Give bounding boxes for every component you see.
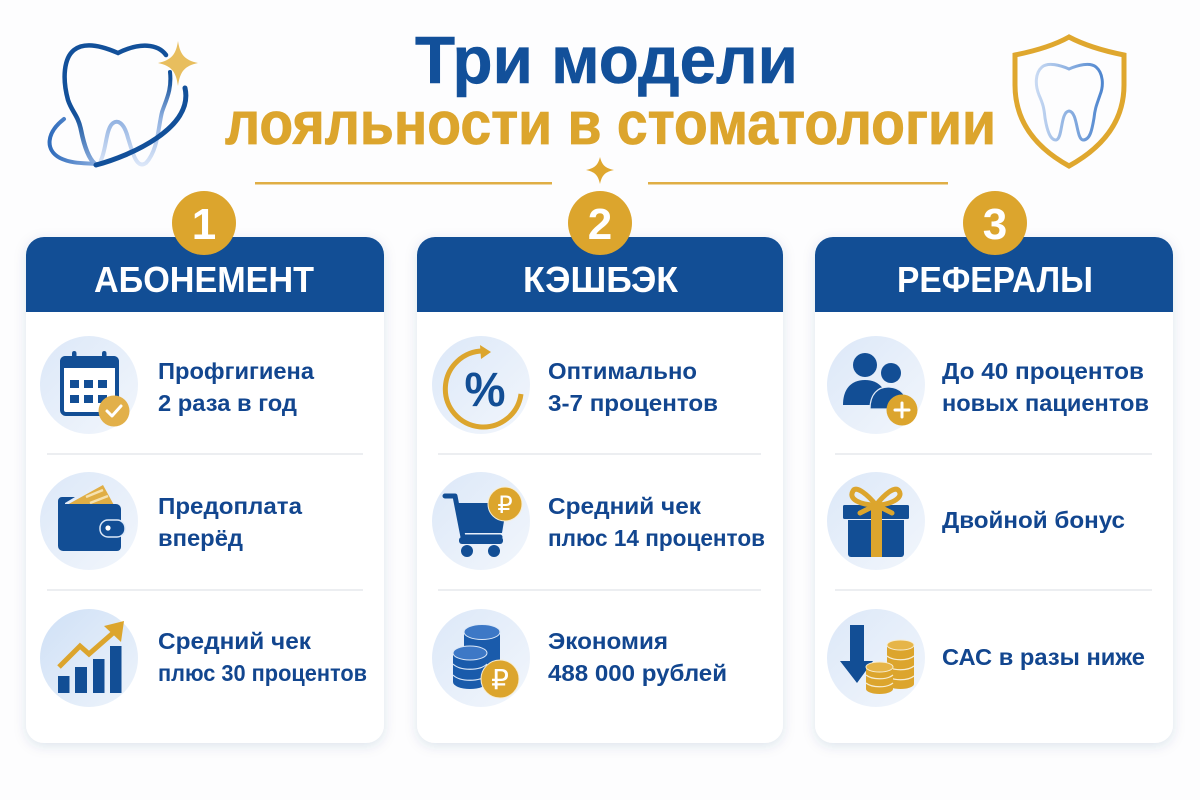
number badge [963,191,1027,255]
icon: gift [827,472,925,570]
text: профгигиена [158,358,315,416]
icon: shield with tooth [1015,37,1124,166]
card header [815,237,1173,312]
panel: абонемент [26,191,384,743]
title line 1: Три модели [415,23,798,98]
icon: cart with coin [432,472,530,570]
text: оптимально: Оптимально [548,358,697,384]
text: предоплата [158,493,303,551]
text: профгигиена: 2 раза в год [158,390,297,416]
title [225,23,996,157]
text: экономия [548,628,727,686]
icon: wallet [40,472,138,570]
icon: people with plus [827,336,925,434]
text: средний чек: плюс 30 процентов [158,660,367,686]
title divider with star [255,157,948,184]
icon: blue coins with ruble [432,609,530,707]
number badge: 3 [983,200,1007,249]
number badge: 2 [588,200,612,249]
text: экономия: Экономия [548,628,668,654]
panel: кэшбэк [417,191,783,743]
text: двойной бонус: Двойной бонус [942,507,1125,533]
icon: percent cycle: % [464,364,506,417]
icon: growth chart [40,609,138,707]
text: средний чек: Средний чек [548,493,701,519]
card body [815,237,1173,743]
heading: РЕФЕРАЛЫ [897,259,1093,300]
card header [417,237,783,312]
text: средний чек [158,628,367,686]
icon: calendar [40,336,138,434]
number badge [172,191,236,255]
text: до 40 процентов [942,358,1149,416]
card body [417,237,783,743]
heading: КЭШБЭК [523,259,679,300]
icon: cart with coin: ₽ [497,492,513,519]
text: профгигиена: Профгигиена [158,358,315,384]
card header [26,237,384,312]
number badge [568,191,632,255]
number badge: 1 [192,200,216,249]
text: средний чек: плюс 14 процентов [548,525,765,551]
text: оптимально: 3-7 процентов [548,390,718,416]
text: средний чек [548,493,765,551]
text: оптимально [548,358,718,416]
text: средний чек: Средний чек [158,628,311,654]
icon: arrow down and gold coins [827,609,925,707]
text: предоплата: Предоплата [158,493,303,519]
text: экономия: 488 000 рублей [548,660,727,686]
heading: АБОНЕМЕНТ [94,259,314,300]
icon: tooth logo with star [50,41,198,165]
icon: percent cycle [432,336,530,434]
text: cac в разы ниже: САС в разы ниже [942,644,1145,670]
text: до 40 процентов: новых пациентов [942,390,1149,416]
text: предоплата: вперёд [158,525,243,551]
card body [26,237,384,743]
panel: рефералы [815,191,1173,743]
title line 2: лояльности в стоматологии [225,90,996,157]
text: до 40 процентов: До 40 процентов [942,358,1144,384]
icon: blue coins with ruble: ₽ [491,664,509,695]
